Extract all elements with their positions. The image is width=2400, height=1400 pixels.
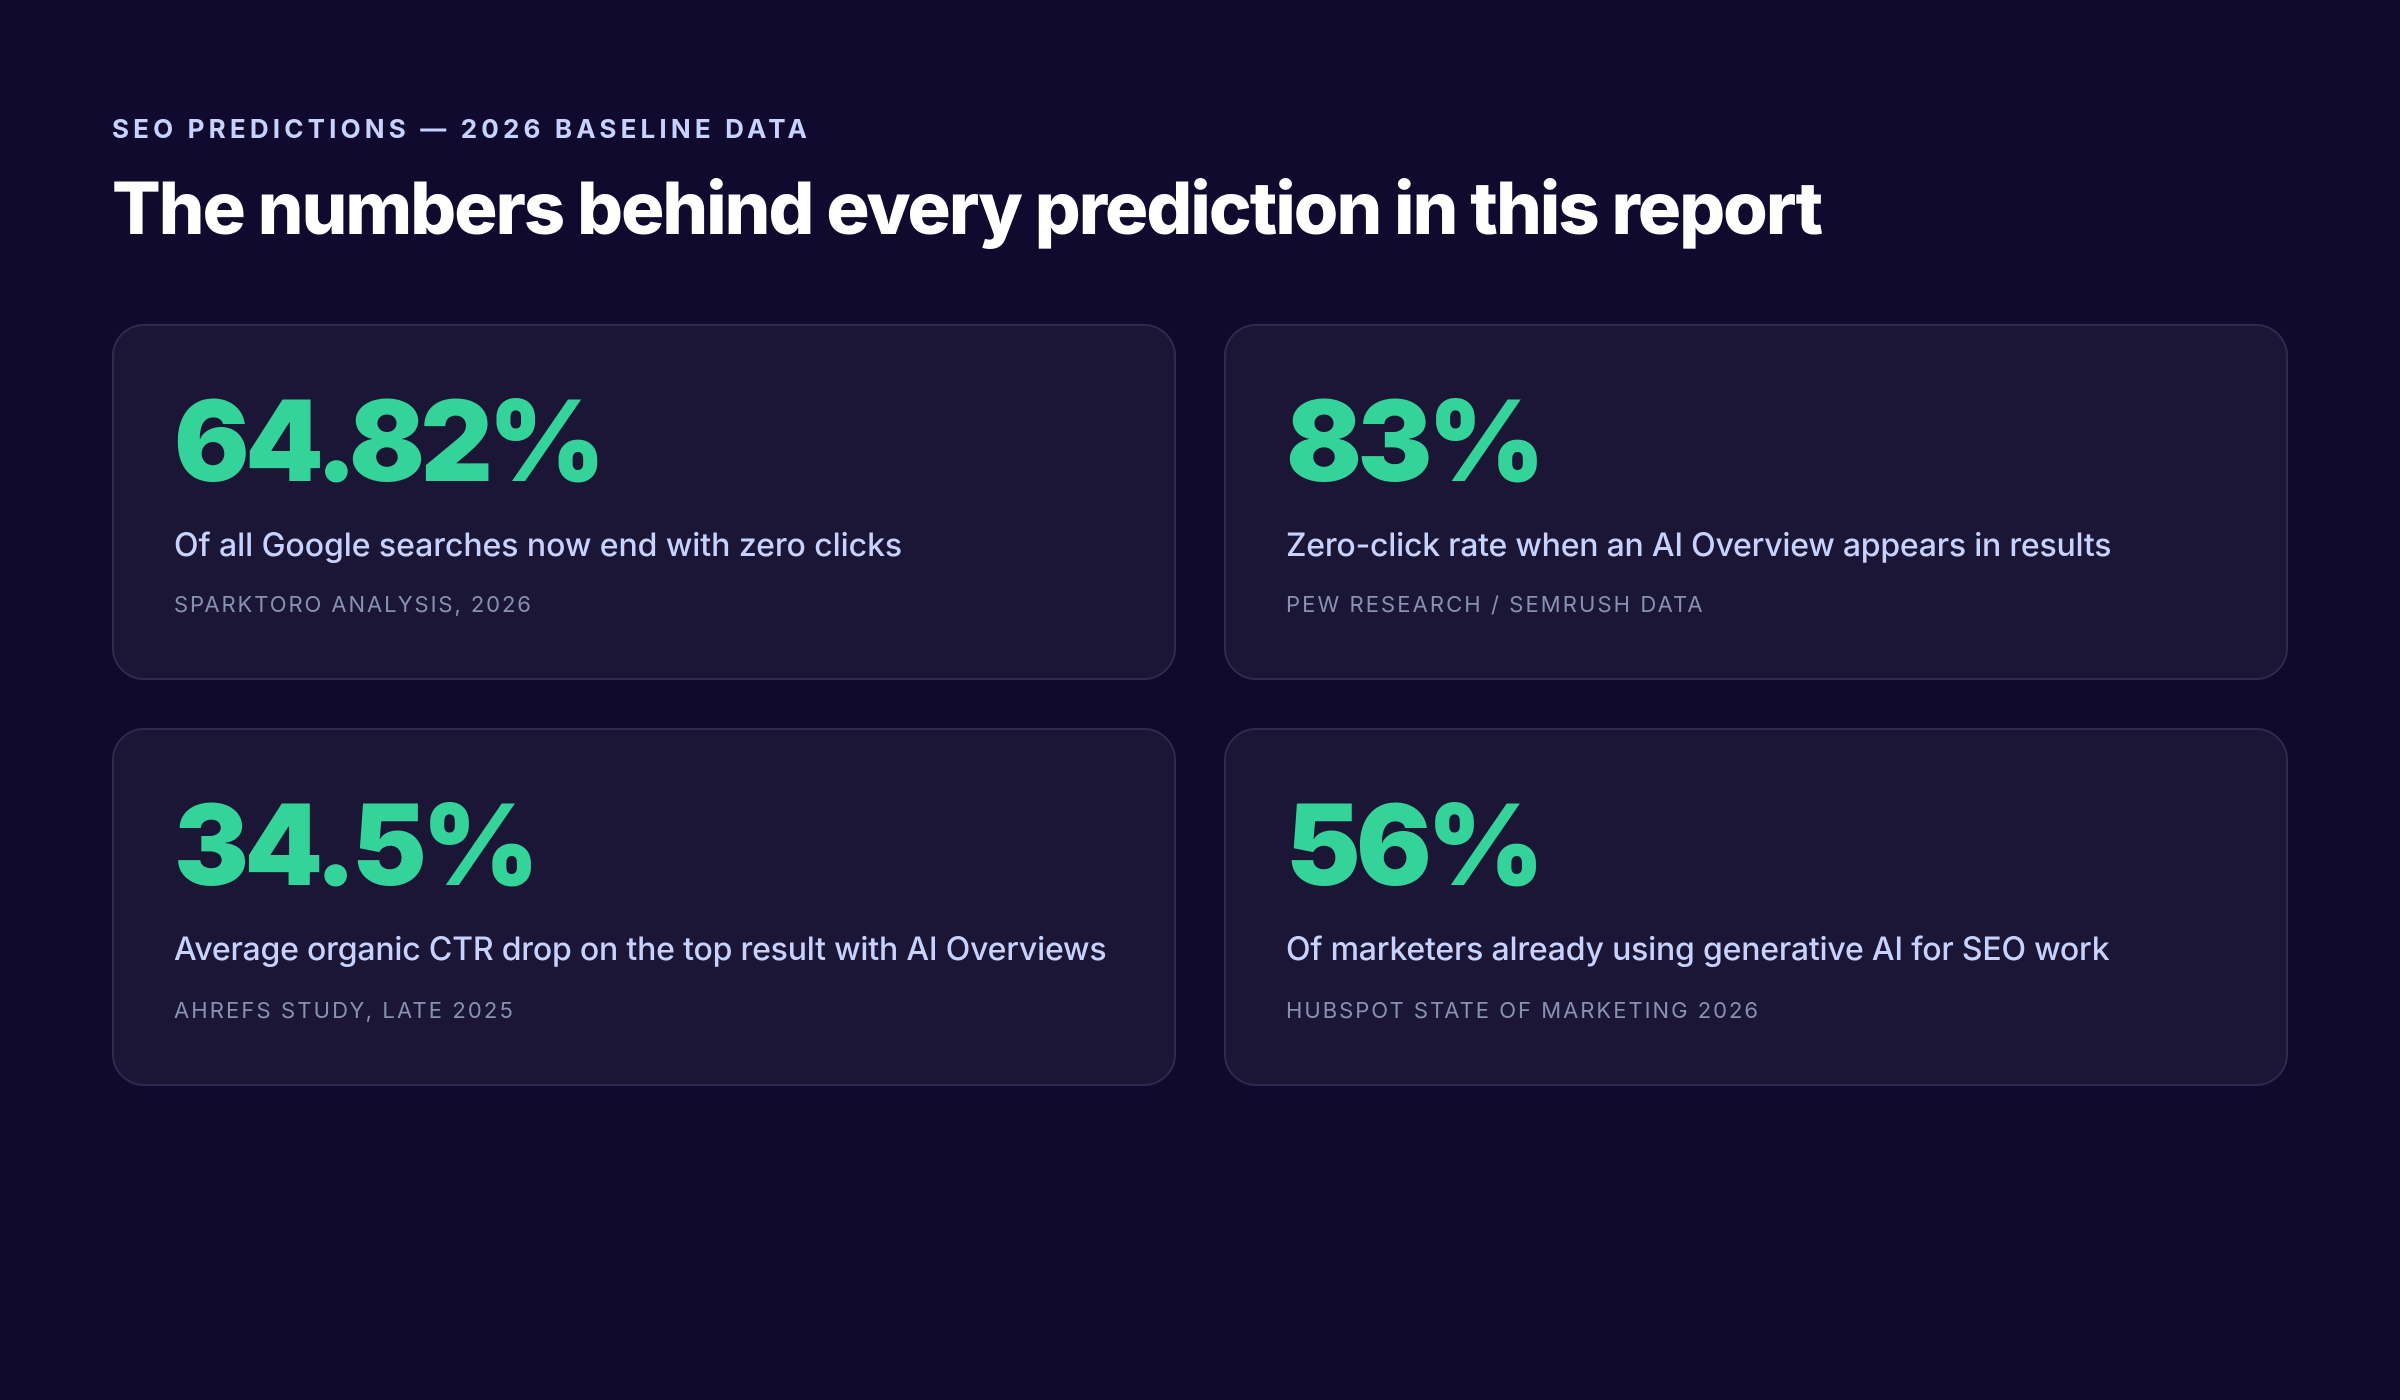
panel: 34.5% stat [112,728,1176,1086]
stat description: Zero-click rate when an AI Overview appears in results [1286,525,2111,564]
eyebrow heading: SEO PREDICTIONS — 2026 BASELINE DATA [112,114,811,145]
panel: 64.82% stat [112,324,1176,680]
source: SPARKTORO ANALYSIS, 2026 [174,592,533,618]
panel: 83% stat [1224,324,2288,680]
panel: 56% stat [1224,728,2288,1086]
stat description: Of all Google searches now end with zero clicks [174,525,902,564]
source: PEW RESEARCH / SEMRUSH DATA [1286,592,1705,618]
stat number: 64.82% [174,373,601,509]
source: HUBSPOT STATE OF MARKETING 2026 [1286,998,1760,1024]
stat description: Of marketers already using generative AI for SEO work [1286,929,2109,968]
stat number: 83% [1286,373,1540,509]
title: The numbers behind every prediction in this report [112,165,1821,252]
source: AHREFS STUDY, LATE 2025 [174,998,515,1024]
stat number: 34.5% [174,777,535,913]
stat description: Average organic CTR drop on the top result with AI Overviews [174,929,1106,968]
stat number: 56% [1286,777,1540,913]
